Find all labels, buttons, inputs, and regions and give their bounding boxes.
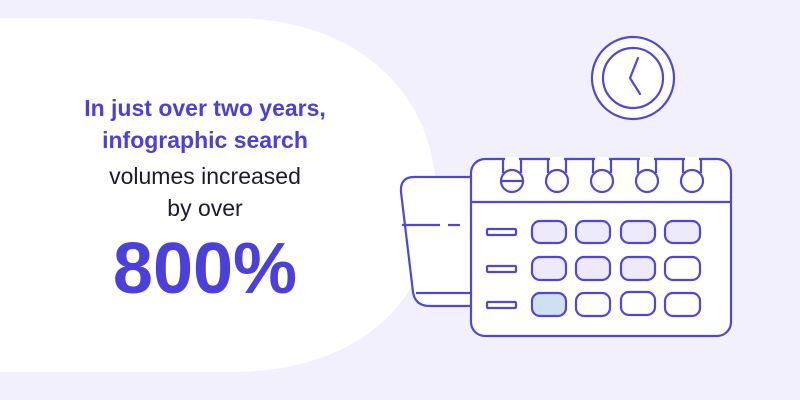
headline text block: 800% (113, 229, 297, 309)
headline text block: In just over two years, (84, 95, 326, 121)
date cells (532, 221, 700, 280)
headline text block: infographic search (102, 127, 308, 153)
headline text block (84, 95, 326, 309)
back card (401, 177, 471, 306)
main calendar body (471, 159, 731, 336)
headline text block: by over (167, 195, 243, 221)
row labels (487, 229, 516, 235)
headline text block: volumes increased (109, 163, 301, 189)
